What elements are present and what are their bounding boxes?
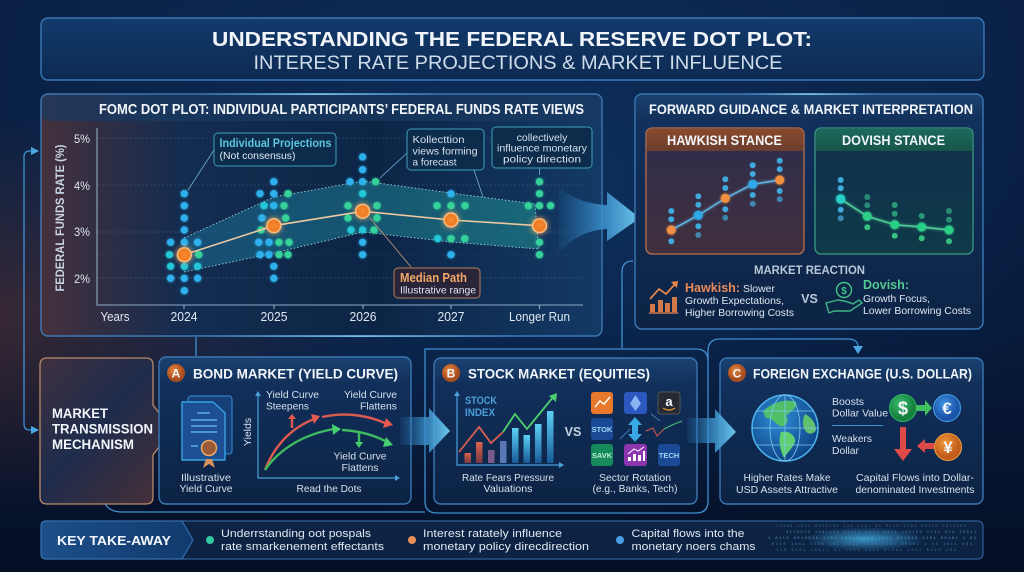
decorative binary readout: 110 0101 10011 01 1001 1011 01001 1011 0010 101 <box>776 549 956 553</box>
chart axes <box>97 128 583 309</box>
callout: median path <box>394 268 480 298</box>
hawkish reaction text: Higher Borrowing Costs <box>685 307 794 319</box>
key take-away ribbon <box>41 521 193 559</box>
yield curve labels: Steepens <box>266 400 309 412</box>
takeaway three: monetary noers chams <box>632 541 756 553</box>
panel: forward guidance <box>635 93 983 329</box>
projection range band <box>184 181 539 272</box>
dovish reaction text <box>863 277 971 317</box>
yield curve labels: Flattens <box>342 462 378 474</box>
dovish heading: DOVISH STANCE <box>842 133 945 148</box>
tile: blue diamond <box>624 392 647 414</box>
market reaction heading: MARKET REACTION <box>754 265 865 277</box>
dovish median line <box>836 194 954 234</box>
FX captions left <box>736 472 838 496</box>
connector: left feedback line <box>24 147 39 434</box>
tile: amazon style: a <box>665 394 673 409</box>
dollar labels: Dollar Value <box>832 408 888 420</box>
takeaway one <box>206 528 385 553</box>
badge C: C <box>733 366 742 380</box>
sector caption <box>592 472 678 495</box>
dollar labels: Dollar <box>832 445 859 457</box>
forward guidance heading: FORWARD GUIDANCE & MARKET INTERPRETATION <box>649 101 973 117</box>
dovish stance card <box>815 128 973 254</box>
document caption: Yield Curve <box>180 483 233 495</box>
coin: euro: € <box>942 399 952 418</box>
icon: bond document <box>182 396 232 468</box>
versus label: VS <box>801 292 818 306</box>
takeaway two <box>408 528 589 553</box>
callout: collection views: views forming <box>412 146 478 158</box>
coin: euro <box>934 394 960 422</box>
icon: dollar in hand <box>826 282 862 313</box>
sector tiles <box>591 392 682 466</box>
dovish reaction text: Lower Borrowing Costs <box>863 305 971 317</box>
hawkish reaction text: Growth Expectations, <box>685 295 784 307</box>
y axis labels: 3% <box>74 225 90 239</box>
dollar labels: Boosts <box>832 396 864 408</box>
trend arrowhead <box>549 393 557 402</box>
badge A <box>167 364 185 382</box>
dots: individual projections <box>166 153 554 294</box>
y axis title: FEDERAL FUNDS RATE (%) <box>55 144 67 292</box>
dollar labels: Weakers <box>832 433 872 445</box>
callout: individual projections: (Not consensus) <box>220 150 296 162</box>
stock caption: Rate Fears Pressure <box>462 472 554 484</box>
callout: collection views: a forecast <box>412 156 457 168</box>
green arrowheads <box>332 424 393 448</box>
hawkish reaction text <box>685 280 794 319</box>
title panel <box>41 18 984 80</box>
tile: STOK: STOK <box>592 425 613 434</box>
arrow: falling dollar <box>894 427 912 461</box>
callout: median path: Median Path <box>400 271 467 285</box>
callout: collective influence: policy direction <box>503 154 581 166</box>
hawkish reaction text: Hawkish: <box>685 280 740 295</box>
icon: rotation arrow <box>628 417 642 442</box>
FX captions right <box>856 472 974 496</box>
median path line <box>184 211 540 255</box>
badge B <box>442 364 460 382</box>
hawkish heading: HAWKISH STANCE <box>667 133 782 148</box>
x axis labels: 2027 <box>438 310 465 324</box>
panel: foreign exchange <box>720 358 983 504</box>
green yield curves <box>265 429 387 470</box>
panel: stock market <box>434 358 697 504</box>
decorative binary readout: 10100 1011 0010100 110 1101 01 0110 1101 00110 1010100 <box>776 525 966 529</box>
icon: rising bars <box>649 281 678 313</box>
yield curve labels: Yield Curve <box>334 450 387 462</box>
panel: market transmission mechanism <box>40 358 172 504</box>
callout: collective influence: collectively <box>517 132 568 144</box>
callout leader lines <box>188 150 540 197</box>
yield curve labels: Read the Dots <box>296 483 362 495</box>
callout: collective influence <box>492 127 592 168</box>
x axis labels: 2024 <box>170 310 198 324</box>
decorative binary readout: 0110 1001 1100 101 1011 0010 1101 00101 1 10 1011 001 <box>772 543 972 547</box>
icon: globe <box>752 395 818 461</box>
stock heading: STOCK MARKET (EQUITIES) <box>468 366 650 382</box>
badge A: A <box>172 366 181 380</box>
icon: dollar in hand: $ <box>841 286 847 297</box>
callout: individual projections: Individual Projections <box>220 136 332 150</box>
yield curve labels <box>266 389 397 495</box>
takeaway one: Underrstanding oot pospals <box>221 528 372 540</box>
y axis labels: 5% <box>74 132 90 146</box>
panel: FOMC dot plot <box>41 93 602 337</box>
badge B: B <box>447 366 456 380</box>
panel: key take-away <box>41 521 983 559</box>
coin: yen: ¥ <box>943 438 953 457</box>
y axis labels: 4% <box>74 179 90 193</box>
hawkish median line <box>667 176 784 234</box>
callout: collection views: Kollecttion <box>412 134 465 146</box>
foreign exchange heading: FOREIGN EXCHANGE (U.S. DOLLAR) <box>753 366 972 382</box>
y axis labels <box>74 132 90 286</box>
arrow: dot plot to forward guidance <box>559 188 640 252</box>
tile: TECH: TECH <box>659 451 679 460</box>
FX captions right: denominated Investments <box>856 484 974 496</box>
x axis labels: 2026 <box>350 310 377 324</box>
tile: purple chart <box>624 444 647 466</box>
FX captions right: Capital Flows into Dollar- <box>856 472 974 484</box>
callout: individual projections <box>214 133 336 166</box>
mechanism text: MECHANISM <box>52 437 134 452</box>
mechanism text: MARKET <box>52 406 109 421</box>
red yield curves <box>265 415 387 470</box>
document caption <box>180 472 233 495</box>
stock caption <box>462 472 554 495</box>
tile: orange chart <box>591 392 613 414</box>
document caption: Illustrative <box>181 472 231 484</box>
title line one: UNDERSTANDING THE FEDERAL RESERVE DOT PLOT: <box>212 28 812 51</box>
dovish reaction text: Growth Focus, <box>863 293 930 305</box>
yield curve labels: Yield Curve <box>344 389 397 401</box>
y axis labels: 2% <box>74 272 90 286</box>
yields axis label: Yields <box>242 418 254 446</box>
decorative binary readout <box>768 525 976 553</box>
sector mini chart <box>620 414 682 439</box>
x axis labels <box>100 310 570 324</box>
hawkish dots <box>668 158 783 244</box>
takeaway two: Interest ratately influence <box>423 528 562 540</box>
candlestick bars <box>464 411 554 463</box>
arrow: yen to dollar <box>917 439 934 453</box>
median markers <box>177 204 547 262</box>
takeaway three <box>616 528 756 553</box>
coin: yen <box>934 434 962 460</box>
arrow: stock to foreign exchange <box>687 409 736 453</box>
arrow: bond to stock <box>400 408 450 453</box>
stock index label <box>465 395 497 419</box>
red arrowheads <box>288 414 393 428</box>
versus label: VS <box>565 425 581 439</box>
x axis labels: 2025 <box>260 310 288 324</box>
x axis labels: Longer Run <box>509 310 570 324</box>
decorative binary readout: 0110010 1001101 00110 1011 0010 110100 1101 010 10011 <box>786 531 976 535</box>
key take-away ribbon: KEY TAKE-AWAY <box>57 533 171 548</box>
panel: bond market <box>159 357 411 504</box>
stock chart axes <box>454 391 564 468</box>
stock index label: INDEX <box>465 407 496 419</box>
bond heading: BOND MARKET (YIELD CURVE) <box>193 366 398 382</box>
callout: collection views <box>407 129 484 170</box>
badge C <box>728 364 746 382</box>
coin: dollar: $ <box>898 398 908 418</box>
dot plot heading: FOMC DOT PLOT: INDIVIDUAL PARTICIPANTS’ FEDERAL FUNDS RATE VIEWS <box>99 102 584 118</box>
title line two: INTEREST RATE PROJECTIONS & MARKET INFLUENCE <box>254 52 782 74</box>
hawkish stance card <box>646 128 804 254</box>
dovish reaction text: Dovish: <box>863 277 909 292</box>
mechanism text: TRANSMISSION <box>52 422 153 436</box>
x axis labels: Years <box>100 310 130 324</box>
takeaway three: Capital flows into the <box>632 528 744 540</box>
takeaway two: monetary policy direcdirection <box>423 541 589 553</box>
sector caption: (e.g., Banks, Tech) <box>592 483 678 495</box>
tile: SAVK: SAVK <box>592 451 613 460</box>
sector caption: Sector Rotation <box>599 472 671 484</box>
yield curve labels: Flattens <box>360 400 397 412</box>
stock trend lines <box>459 396 554 452</box>
yield curve labels: Yield Curve <box>266 389 319 401</box>
hawkish reaction text: Slower <box>743 283 775 295</box>
mechanism text <box>52 406 153 452</box>
callout: median path: Illustrative range <box>400 284 476 296</box>
decorative binary readout: 1 0110 0010010 1101 100101101 1011 011010 1101 00101 1 01 <box>768 537 976 541</box>
yield chart axes <box>255 391 400 481</box>
coin: dollar <box>890 394 916 422</box>
FX captions left: USD Assets Attractive <box>736 484 838 496</box>
FX captions left: Higher Rates Make <box>744 472 831 484</box>
connector: lower routing lines <box>105 261 863 513</box>
dollar labels <box>832 396 888 457</box>
dovish dots <box>838 177 952 244</box>
stock caption: Valuations <box>484 483 532 495</box>
stock index label: STOCK <box>465 395 497 407</box>
takeaway one: rate smarkenement effectants <box>221 541 385 553</box>
callout: collective influence: influence monetary <box>497 142 588 154</box>
arrow: dollar to euro <box>916 400 932 416</box>
